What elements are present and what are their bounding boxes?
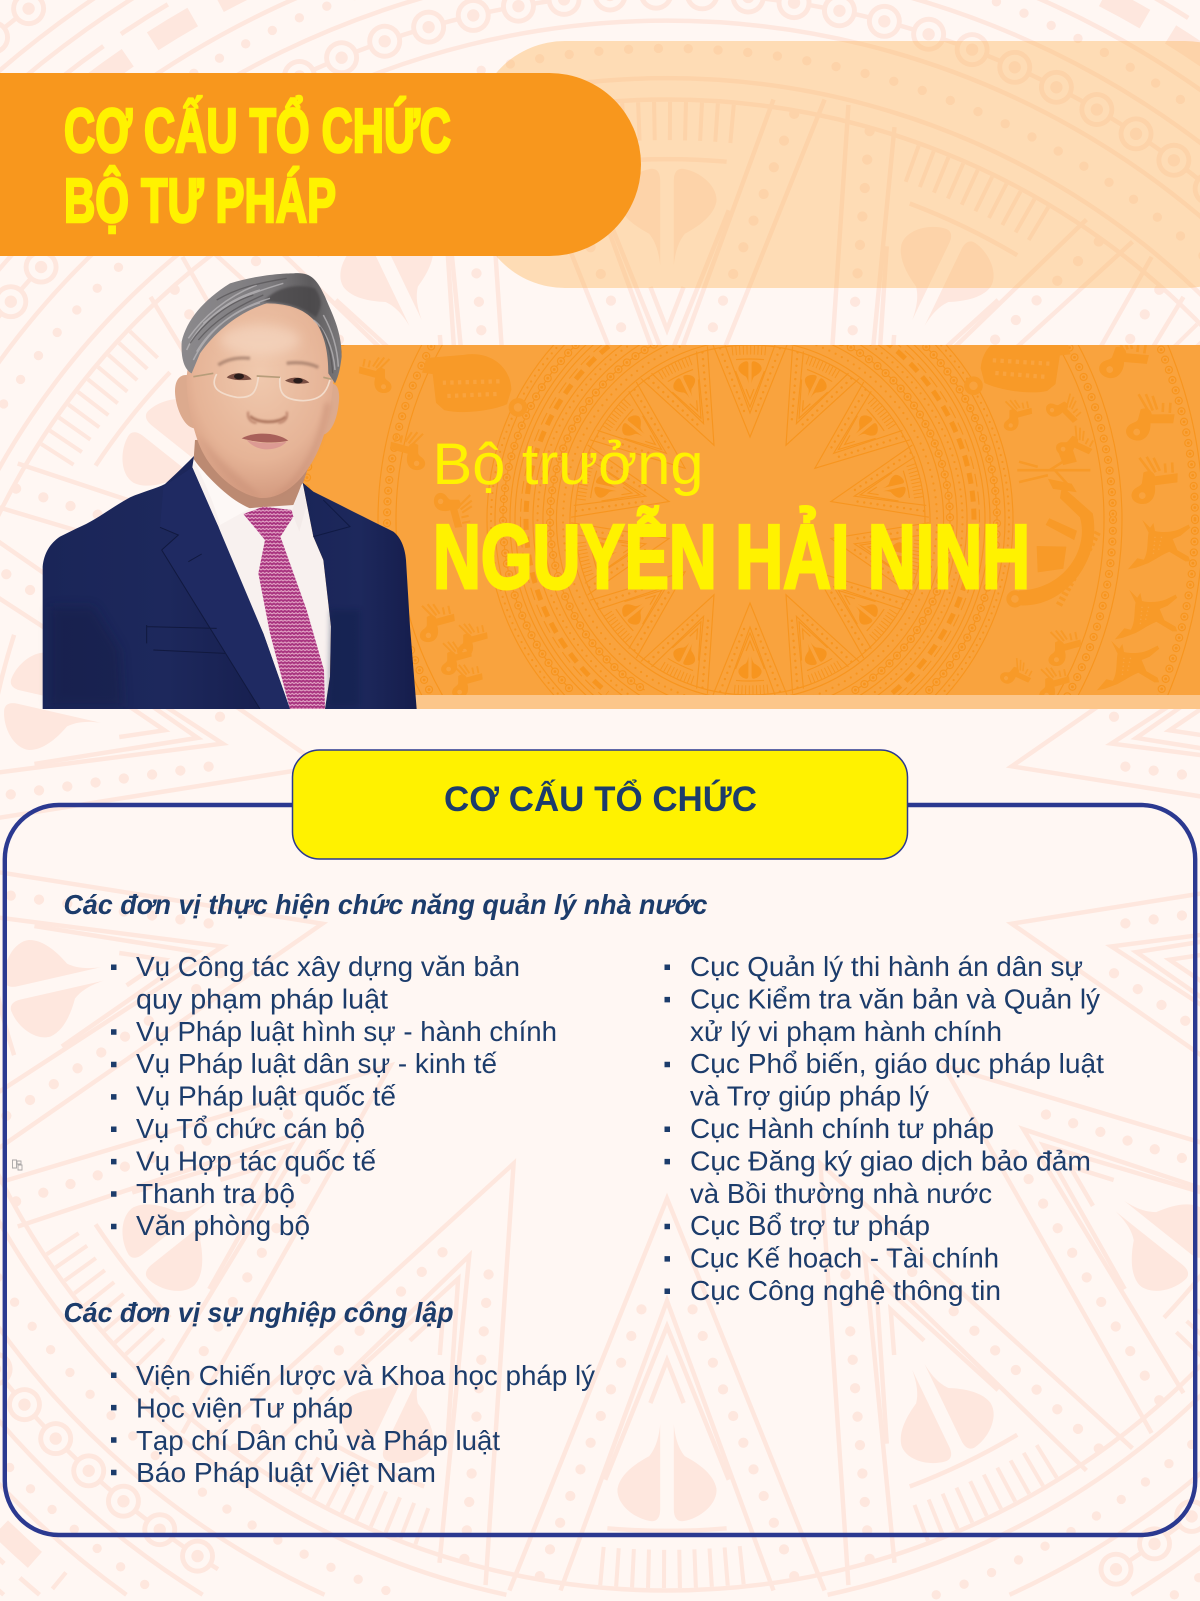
shirt <box>192 457 331 709</box>
heading: state management units: Các đơn vị thực hiện chức năng quản lý nhà nước <box>64 889 708 920</box>
list: departments: Vụ Pháp luật hình sự - hành chính <box>136 1016 557 1047</box>
eyebrows <box>218 358 318 367</box>
list: departments: quy phạm pháp luật <box>136 983 388 1014</box>
neck <box>194 440 308 526</box>
face <box>187 303 333 498</box>
title line 2: BỘ TƯ PHÁP <box>64 167 336 236</box>
glasses <box>214 374 330 401</box>
hair <box>182 273 342 383</box>
jacket shading <box>56 611 119 702</box>
list: departments: Vụ Pháp luật quốc tế <box>136 1081 396 1112</box>
eyes <box>227 373 252 380</box>
list: bureaus: Cục Công nghệ thông tin <box>690 1275 1001 1306</box>
list: bureaus: Cục Kế hoạch - Tài chính <box>690 1243 999 1274</box>
list: bureaus: Cục Quản lý thi hành án dân sự <box>690 951 1083 982</box>
tie <box>243 507 325 709</box>
forehead highlight <box>220 325 300 355</box>
right ear <box>323 384 339 435</box>
icon: small margin mark <box>12 1160 22 1170</box>
list: bureaus: Cục Kiểm tra văn bản và Quản lý <box>690 983 1100 1014</box>
nose <box>250 416 286 422</box>
list: public service units: Học viện Tư pháp <box>136 1392 353 1423</box>
list: bureaus <box>664 951 1104 1306</box>
jaw shading <box>212 454 240 482</box>
suit jacket <box>43 456 290 709</box>
lower band strip <box>300 695 1200 709</box>
pale header band <box>475 41 1200 288</box>
list: bureaus: Cục Phổ biến, giáo dục pháp luật <box>690 1048 1104 1079</box>
list: bureaus: xử lý vi phạm hành chính <box>690 1016 1002 1047</box>
list: bureaus: Cục Bổ trợ tư pháp <box>690 1210 930 1241</box>
list: bureaus: Cục Đăng ký giao dịch bảo đảm <box>690 1145 1091 1176</box>
list: public service units: Tạp chí Dân chủ và Pháp luật <box>136 1425 500 1456</box>
list: public service units <box>111 1360 595 1488</box>
list: departments: Vụ Hợp tác quốc tế <box>136 1145 376 1176</box>
list: departments: Thanh tra bộ <box>136 1178 295 1209</box>
list: bureaus: và Bồi thường nhà nước <box>690 1178 992 1209</box>
list: bureaus: và Trợ giúp pháp lý <box>690 1081 929 1112</box>
heading: public service units: Các đơn vị sự nghiệp công lập <box>64 1297 454 1328</box>
title banner <box>0 73 641 256</box>
mouth <box>242 434 288 443</box>
list: departments: Vụ Tổ chức cán bộ <box>136 1113 365 1144</box>
section badge <box>292 750 908 859</box>
list: departments: Văn phòng bộ <box>136 1210 310 1241</box>
section badge title: CƠ CẤU TỔ CHỨC <box>444 779 757 819</box>
role label: Bộ trưởng <box>432 432 704 497</box>
title line 1: CƠ CẤU TỔ CHỨC <box>64 96 451 166</box>
list: departments: Vụ Pháp luật dân sự - kinh tế <box>136 1048 497 1079</box>
organisation panel <box>5 750 1195 1535</box>
list: bureaus: Cục Hành chính tư pháp <box>690 1113 994 1144</box>
list: departments <box>111 951 557 1241</box>
left ear <box>175 375 194 428</box>
list: public service units: Viện Chiến lược và Khoa học pháp lý <box>136 1360 595 1391</box>
minister banner <box>302 345 1200 709</box>
list: public service units: Báo Pháp luật Việt Nam <box>136 1457 436 1488</box>
drum pattern in banner <box>304 345 1200 695</box>
list: departments: Vụ Công tác xây dựng văn bản <box>136 951 520 982</box>
portrait of the minister <box>43 273 417 709</box>
collar <box>196 462 250 508</box>
